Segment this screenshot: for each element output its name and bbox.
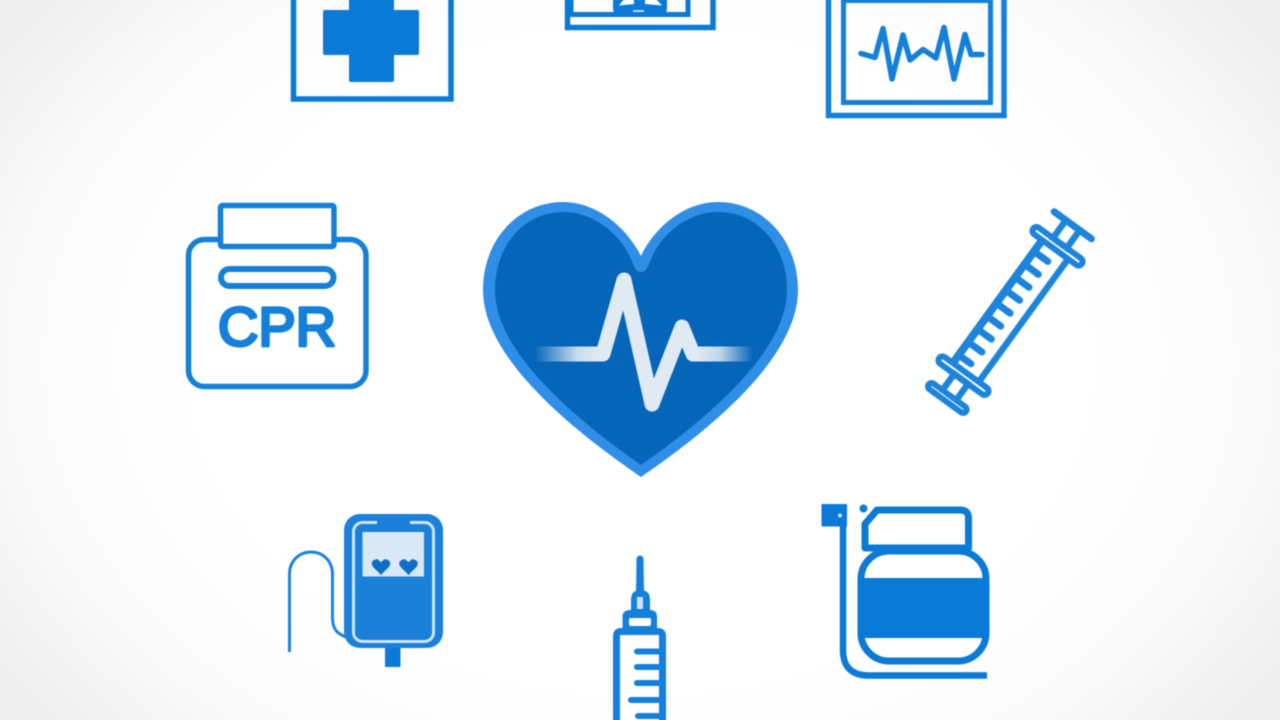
icon: CPR clipboard (188, 206, 366, 386)
icon: ECG monitor (828, 0, 1004, 116)
icon: IV bag (290, 514, 443, 667)
icon: diagonal syringe (921, 208, 1097, 418)
label: CPR: CPR (218, 296, 336, 358)
icon: top monitor (568, 0, 713, 28)
icon: bottom syringe (616, 556, 662, 720)
icon: medical cross box (294, 0, 451, 99)
icon: central heart with pulse (483, 202, 798, 477)
icon: medicine jar with tube (822, 504, 988, 676)
